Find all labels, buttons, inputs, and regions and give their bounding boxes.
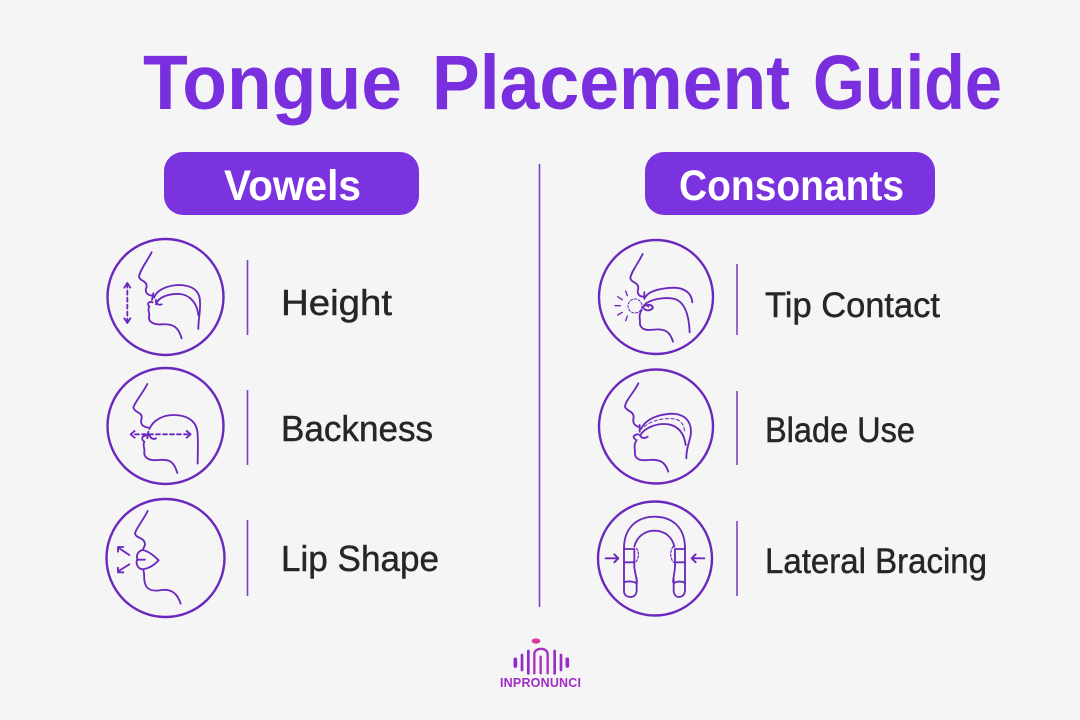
title — [143, 40, 1002, 126]
icon: tip contact — [599, 240, 713, 354]
heading: Vowels: Vowels — [224, 162, 361, 210]
icon: tongue height — [108, 239, 224, 355]
icon: blade use — [599, 370, 713, 484]
logo: Inpronunci: INPRONUNCI — [500, 676, 581, 690]
label: Lip Shape: Lip Shape — [281, 538, 439, 579]
label: Backness: Backness — [281, 408, 433, 449]
heading: Consonants: Consonants — [679, 162, 904, 210]
logo: Inpronunci — [500, 638, 581, 690]
title: Tongue — [143, 40, 402, 126]
heading: Vowels — [164, 152, 419, 215]
label: Height: Height — [281, 282, 392, 323]
icon: lateral bracing — [598, 502, 712, 616]
label: Blade Use: Blade Use — [765, 411, 915, 450]
icon: lip shape — [106, 499, 224, 617]
icon: tongue backness — [108, 368, 224, 484]
heading: Consonants — [645, 152, 935, 215]
label: Tip Contact: Tip Contact — [765, 286, 940, 325]
label: Lateral Bracing: Lateral Bracing — [765, 542, 987, 581]
title: Placement — [432, 40, 790, 126]
title: Guide — [813, 40, 1002, 126]
